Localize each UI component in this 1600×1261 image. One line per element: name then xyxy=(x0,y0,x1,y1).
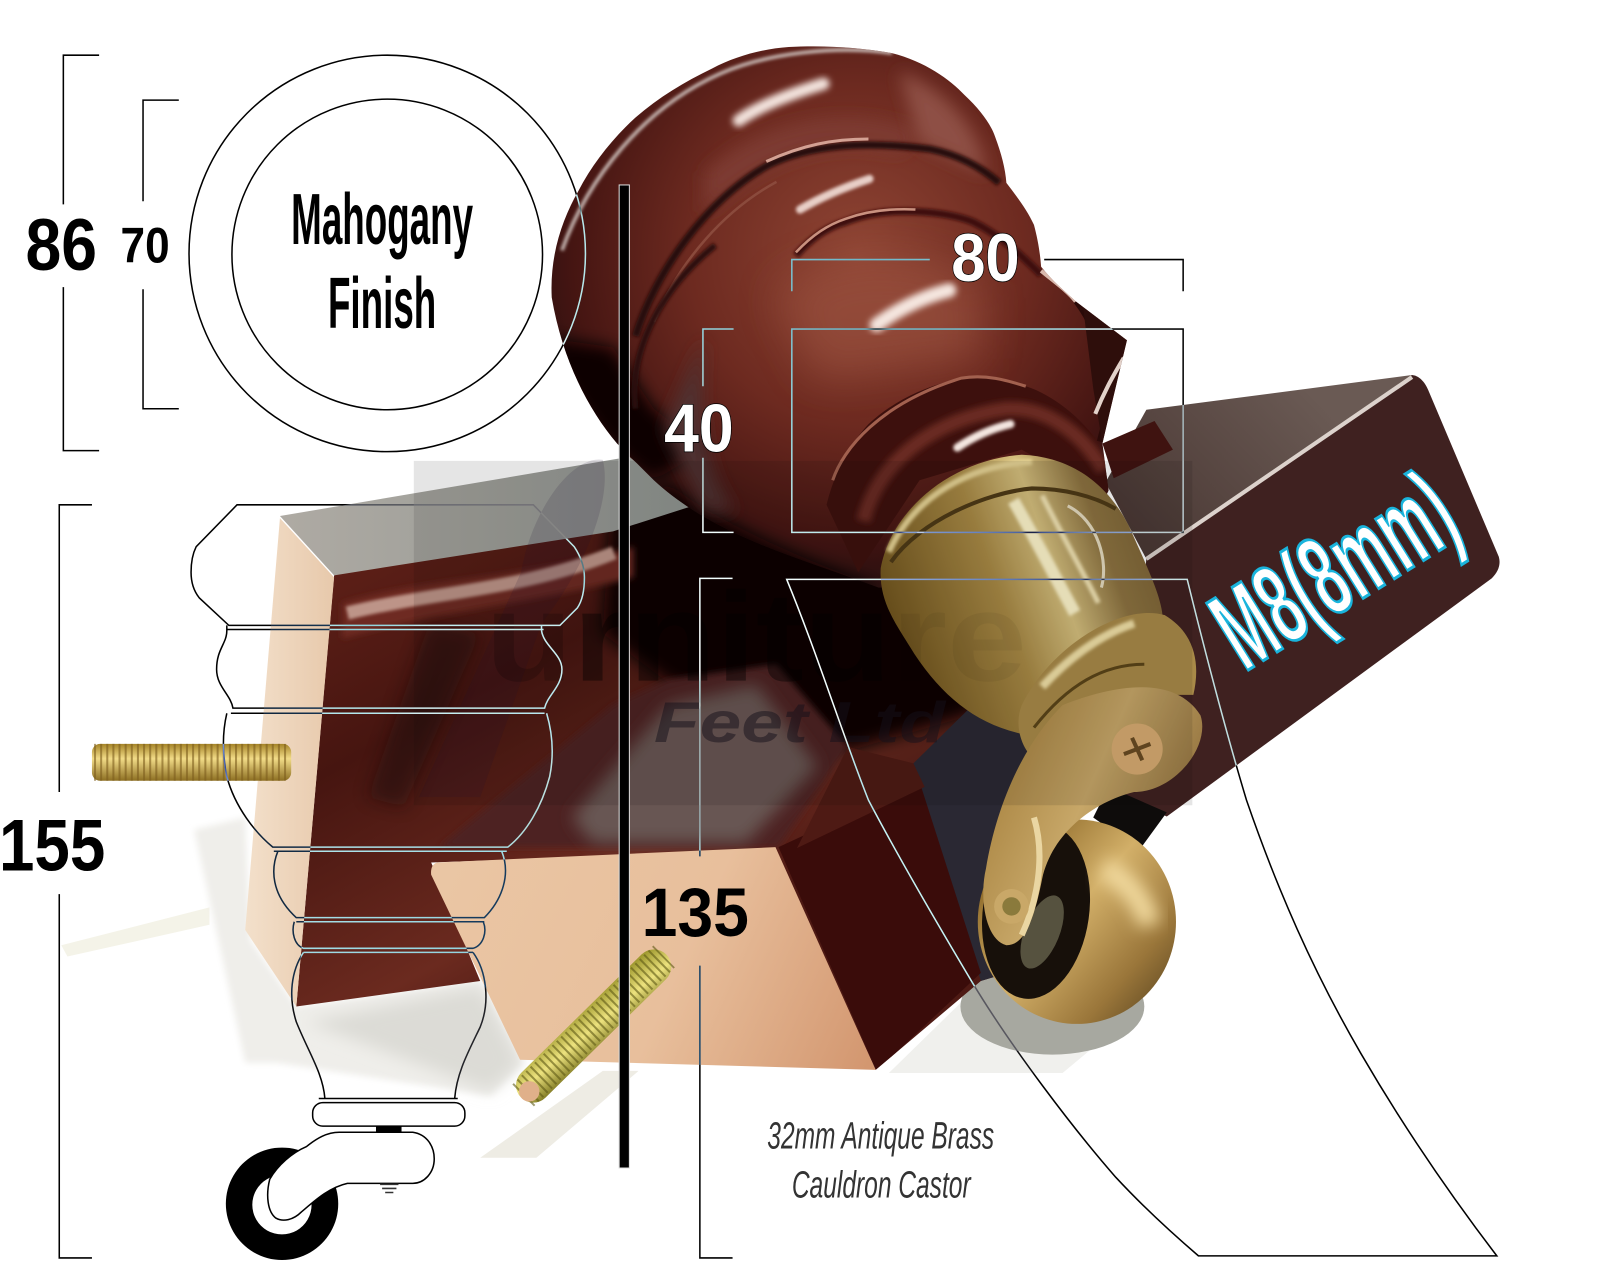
wood block: front tan end face xyxy=(431,847,876,1070)
watermark: slanted initial xyxy=(419,460,605,797)
castor wheel xyxy=(971,817,1176,1024)
dimension bracket: 80 xyxy=(792,260,1183,291)
knob collar ring xyxy=(827,377,1114,572)
plate footprint rectangle xyxy=(792,329,1183,532)
knob lower-left shadow xyxy=(559,330,686,484)
dimension bracket: 70 xyxy=(143,100,179,409)
dimension: 86: 86 xyxy=(26,203,97,286)
finish label xyxy=(291,179,473,344)
dimension: 40: 40 xyxy=(664,392,734,467)
castor cup xyxy=(881,455,1163,736)
vertical divider bar xyxy=(619,185,629,1168)
semi-transparent watermark panel xyxy=(414,460,1192,805)
watermark: tagline: Feet Ltd xyxy=(654,691,946,755)
wood block: left tan end face xyxy=(245,518,334,1007)
finish label line 1: Mahogany xyxy=(291,179,473,260)
dimension bracket: 155 xyxy=(59,505,92,1258)
castor swivel ring xyxy=(1018,613,1196,761)
dimension: 135: 135 xyxy=(642,874,749,951)
wood block: left top face xyxy=(280,457,690,575)
small castor drawing xyxy=(226,1126,434,1260)
finish label line 2: Finish xyxy=(328,263,436,344)
knob lower lobe edge xyxy=(1076,301,1106,441)
dimension: 80: 80 xyxy=(951,221,1020,296)
castor screw xyxy=(1112,723,1163,775)
dimension bracket: 86 xyxy=(63,55,99,451)
threaded bolt: front xyxy=(519,956,664,1102)
knob rim highlight xyxy=(562,50,892,250)
castor arm outline xyxy=(268,1132,434,1220)
tyre xyxy=(226,1148,338,1260)
turned mahogany knob xyxy=(542,46,1173,613)
castor bolt xyxy=(380,1184,398,1193)
inner diameter circle xyxy=(232,99,543,410)
knob grooves xyxy=(636,145,999,336)
castor caption xyxy=(767,1116,994,1207)
dimension bracket: 135 xyxy=(700,578,733,1258)
knob broad lobes xyxy=(703,120,905,204)
dimension: 70: 70 xyxy=(121,218,170,274)
floor shadows xyxy=(61,818,1144,1158)
splayed arm outline xyxy=(787,579,1497,1256)
arm shadow gap xyxy=(1093,787,1167,850)
dimension: 155: 155 xyxy=(0,804,105,887)
castor stem xyxy=(376,1126,402,1133)
turned leg outline xyxy=(191,505,584,1126)
brass cauldron castor xyxy=(881,455,1202,1024)
outer diameter circle xyxy=(189,55,585,452)
castor arm xyxy=(983,687,1202,945)
watermark: brand name: urnitu re xyxy=(485,566,1027,708)
caption line 1: 32mm Antique Brass xyxy=(767,1116,994,1158)
caption line 2: Cauldron Castor xyxy=(792,1165,972,1207)
knob gloss highlights xyxy=(739,84,823,121)
castor cup highlights xyxy=(1014,501,1075,613)
glossy arm edge highlight xyxy=(1146,377,1412,559)
threaded bolt: left xyxy=(92,744,291,781)
wood block: shading and gloss xyxy=(342,460,1032,1071)
wood block: right arm end face xyxy=(1124,375,1500,816)
castor axle xyxy=(994,889,1029,924)
wood block: right arm top face xyxy=(1105,375,1412,559)
castor cup collar line xyxy=(891,488,1116,562)
dimension bracket: 40 xyxy=(703,329,734,532)
product photo: mahogany foot with brass castor xyxy=(61,46,1500,1158)
wood block: main stained side xyxy=(296,455,1032,1070)
